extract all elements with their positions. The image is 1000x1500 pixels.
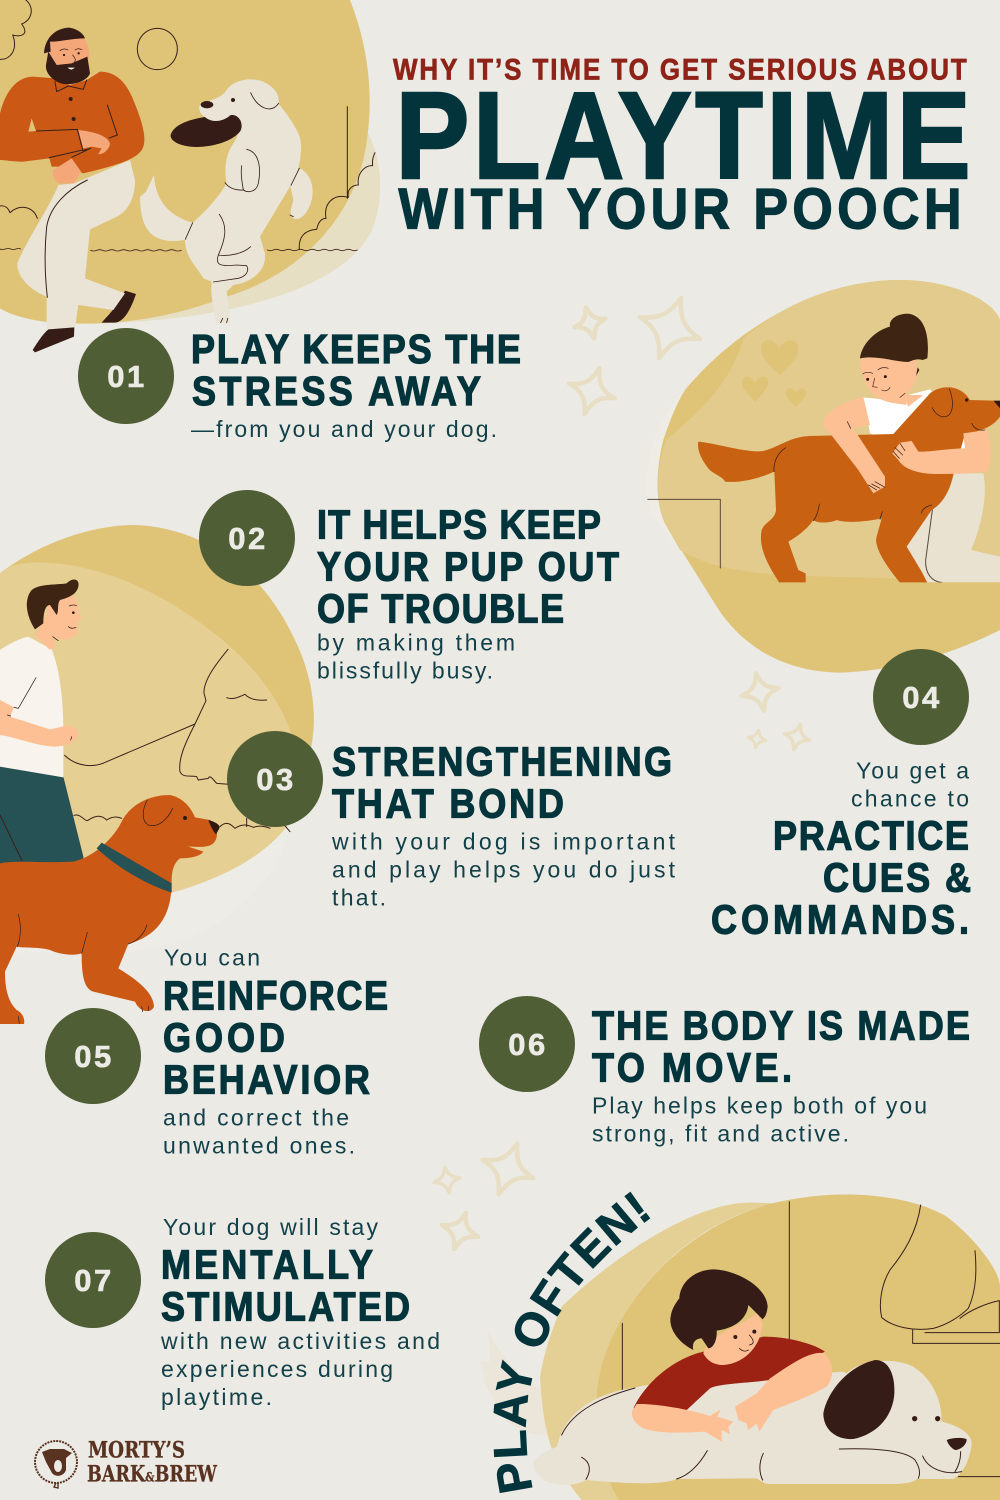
logo text: BARK&BREW [87, 1462, 217, 1488]
woman [860, 314, 1000, 582]
brown dog on leash [0, 795, 220, 1024]
badge 06: 06 [508, 1027, 548, 1062]
text 07 [160, 1328, 440, 1410]
badge 02 [199, 490, 295, 586]
title line 2: PLAYTIME [396, 67, 971, 204]
text 07: playtime. [161, 1384, 272, 1410]
heading 02: YOUR PUP OUT [317, 544, 619, 590]
title line 1: WHY IT’S TIME TO GET SERIOUS ABOUT [393, 53, 967, 86]
badge 03: 03 [256, 762, 296, 797]
heading 01 [191, 327, 521, 415]
heading 03 [332, 739, 672, 827]
badge 01: 01 [107, 359, 147, 394]
text 02 [317, 630, 515, 684]
heading 02: OF TROUBLE [317, 586, 564, 632]
panel: 04 cues and commands [711, 649, 971, 943]
badge 03 [227, 731, 323, 827]
badge 05 [45, 1008, 141, 1104]
hearts [742, 340, 806, 407]
text 05 [163, 1104, 355, 1158]
heading 05: REINFORCE [163, 973, 388, 1019]
heading 07: STIMULATED [161, 1284, 410, 1330]
text 04 [851, 758, 969, 812]
text 05: and correct the [163, 1104, 349, 1130]
text 07 intro: Your dog will stay [163, 1214, 378, 1240]
heading 05 [163, 973, 388, 1103]
illustration: man playing frisbee with white dog [0, 0, 380, 352]
text 02: blissfully busy. [317, 658, 493, 684]
heading 02 [317, 502, 619, 632]
title line 3: WITH YOUR POOCH [398, 176, 961, 241]
badge 04: 04 [902, 680, 942, 715]
heading 04: COMMANDS. [711, 897, 969, 943]
panel: 02 keep pup out of trouble (badge, heading, text) [0, 490, 619, 1024]
man [0, 28, 144, 352]
text 03 [331, 828, 676, 910]
illustration: woman hugging brown dog [647, 280, 1000, 673]
woman arms [824, 397, 885, 493]
illustration: man walking brown dog [0, 525, 314, 1024]
text 05 intro: You can [164, 944, 260, 970]
heading 04: PRACTICE [773, 813, 969, 859]
heading 04: CUES & [823, 855, 971, 901]
badge 07 [45, 1232, 141, 1328]
panel: 01 play keeps stress away [78, 327, 521, 442]
badge 01 [78, 328, 174, 424]
white dog with frisbee [140, 79, 313, 323]
heading 01: PLAY KEEPS THE [191, 327, 521, 373]
panel: 07 mentally stimulated [45, 1214, 440, 1410]
heading 02: IT HELPS KEEP [317, 502, 601, 548]
boy [632, 1269, 832, 1442]
heading 04 [711, 813, 971, 943]
text 07: with new activities and [160, 1328, 440, 1354]
man walking [0, 580, 83, 887]
badge 06 [479, 996, 575, 1092]
panel: 03 strengthening bond [227, 731, 676, 910]
heading 06: TO MOVE. [592, 1045, 792, 1091]
text 06: Play helps keep both of you [592, 1092, 927, 1118]
heading 07 [161, 1242, 410, 1330]
text 07: experiences during [161, 1356, 393, 1382]
text 03: and play helps you do just [332, 856, 676, 882]
heading 03: STRENGTHENING [332, 739, 672, 785]
heading 01: STRESS AWAY [192, 369, 481, 415]
badge 04 [873, 649, 969, 745]
panel: 06 body made to move [479, 996, 970, 1146]
text 01: —from you and your dog. [191, 416, 497, 442]
decorative stars lower [432, 1134, 543, 1255]
badge 05: 05 [74, 1039, 114, 1074]
text 03: with your dog is important [331, 828, 676, 854]
text 04: You get a [856, 758, 969, 784]
logo badge [35, 1441, 77, 1488]
text 05: unwanted ones. [163, 1132, 355, 1158]
logo text: MORTY’S [88, 1438, 185, 1464]
badge 07: 07 [74, 1263, 114, 1298]
logo text [87, 1438, 217, 1488]
text 06: strong, fit and active. [592, 1120, 849, 1146]
heading 05: BEHAVIOR [163, 1057, 370, 1103]
heading 07: MENTALLY [161, 1242, 373, 1288]
text 02: by making them [317, 630, 515, 656]
spotted dog [533, 1360, 972, 1485]
heading 03: THAT BOND [332, 781, 564, 827]
heading 05: GOOD [163, 1015, 285, 1061]
curved text: play often: PLAY OFTEN! [494, 1192, 650, 1494]
text 06 [592, 1092, 927, 1146]
panel: 05 reinforce good behavior [45, 944, 388, 1158]
illustration: boy hugging spotted dog [480, 1194, 1000, 1500]
heading 06: THE BODY IS MADE [592, 1003, 970, 1049]
text 04: chance to [851, 786, 969, 812]
decorative stars upper [562, 287, 813, 753]
heading 06 [592, 1003, 970, 1091]
text 03: that. [332, 884, 386, 910]
title block [393, 53, 971, 241]
brown dog [698, 387, 1000, 583]
logo: morty's bark and brew [35, 1438, 217, 1488]
badge 02: 02 [228, 521, 268, 556]
